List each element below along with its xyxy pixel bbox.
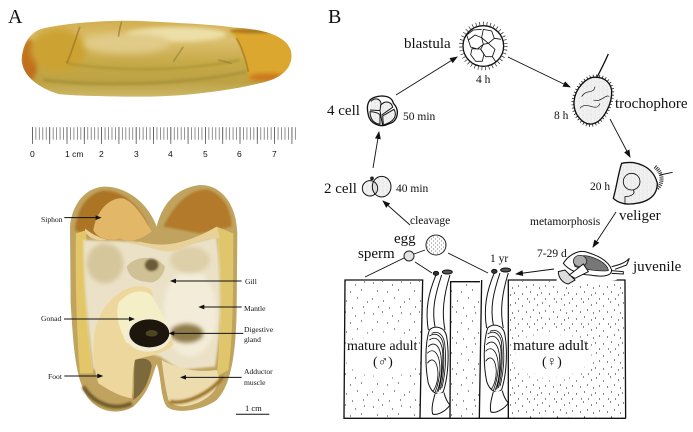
stage labels: 40 min [396,183,429,195]
anatomy labels: muscle [244,378,266,387]
anatomy labels: Siphon [41,215,63,224]
anatomy labels: Digestive [244,325,274,334]
ruler: 1 cm [65,149,83,159]
icon: blastula [461,23,506,69]
icon: veliger [613,162,673,204]
panel label B: B [328,6,341,28]
anatomy labels: 1 cm [245,403,262,413]
icon: sperm [404,251,414,261]
icon: trochophore [573,54,613,125]
stage labels [324,36,688,370]
stage labels: sperm [358,246,395,262]
sediment and burrowing adults [343,268,626,418]
stage labels: 4 h [476,74,491,86]
icon: juvenile [557,251,629,288]
stage labels: 7-29 d [537,248,567,260]
stage labels: 4 cell [327,103,360,119]
anatomy labels [41,215,274,413]
stage labels: metamorphosis [530,216,601,228]
clam: female adult [484,268,511,412]
anatomy labels: Gill [245,277,257,286]
anatomy labels: Foot [48,372,63,381]
stippled sediment: female side [509,281,625,418]
stage labels: veliger [619,208,661,224]
icon: egg [426,235,446,255]
ruler: 4 [168,149,173,159]
stippled sediment: male side [345,281,422,418]
anatomy labels: Mantle [244,304,266,313]
anatomy labels: gland [244,335,261,344]
stage labels: (♀) [542,355,562,370]
anatomy labels: Adductor [244,367,273,376]
icon: 2 cell [362,176,391,197]
ruler: 7 [272,149,277,159]
stage labels: blastula [404,36,451,52]
stage labels: 50 min [403,111,436,123]
stage labels: mature adult [513,338,589,354]
stippled sediment: middle column [451,282,479,418]
stage labels: mature adult [347,339,417,354]
annotation arrows [64,215,269,414]
ruler: 5 [203,149,208,159]
anatomy labels: Gonad [41,314,61,323]
stage labels: cleavage [410,215,450,227]
life cycle arrows [365,57,630,277]
stage labels: 2 cell [324,181,357,197]
clam: male adult [426,270,452,414]
stage labels: 20 h [590,181,610,193]
photo: opened razor clam anatomy [64,185,269,414]
ruler: 2 [99,149,104,159]
ruler: 3 [134,149,139,159]
larval stages [362,23,673,204]
stage labels: 8 h [554,110,569,122]
burrow outlines [343,280,626,418]
panel label A: A [8,6,23,28]
ruler: 0 [30,149,35,159]
clear area behind male text [344,333,420,377]
stage labels: juvenile [632,259,682,275]
white mask over sediment top edge [557,267,617,288]
stage labels: trochophore [615,96,688,112]
ruler [30,134,297,159]
icon: 4 cell [367,96,397,126]
stage labels: (♂) [373,355,393,370]
ruler: 6 [237,149,242,159]
photo: razor clam shell exterior [21,21,293,97]
stage labels: 1 yr [490,253,508,265]
clear area behind female text [512,332,592,380]
stage labels: egg [394,231,416,247]
